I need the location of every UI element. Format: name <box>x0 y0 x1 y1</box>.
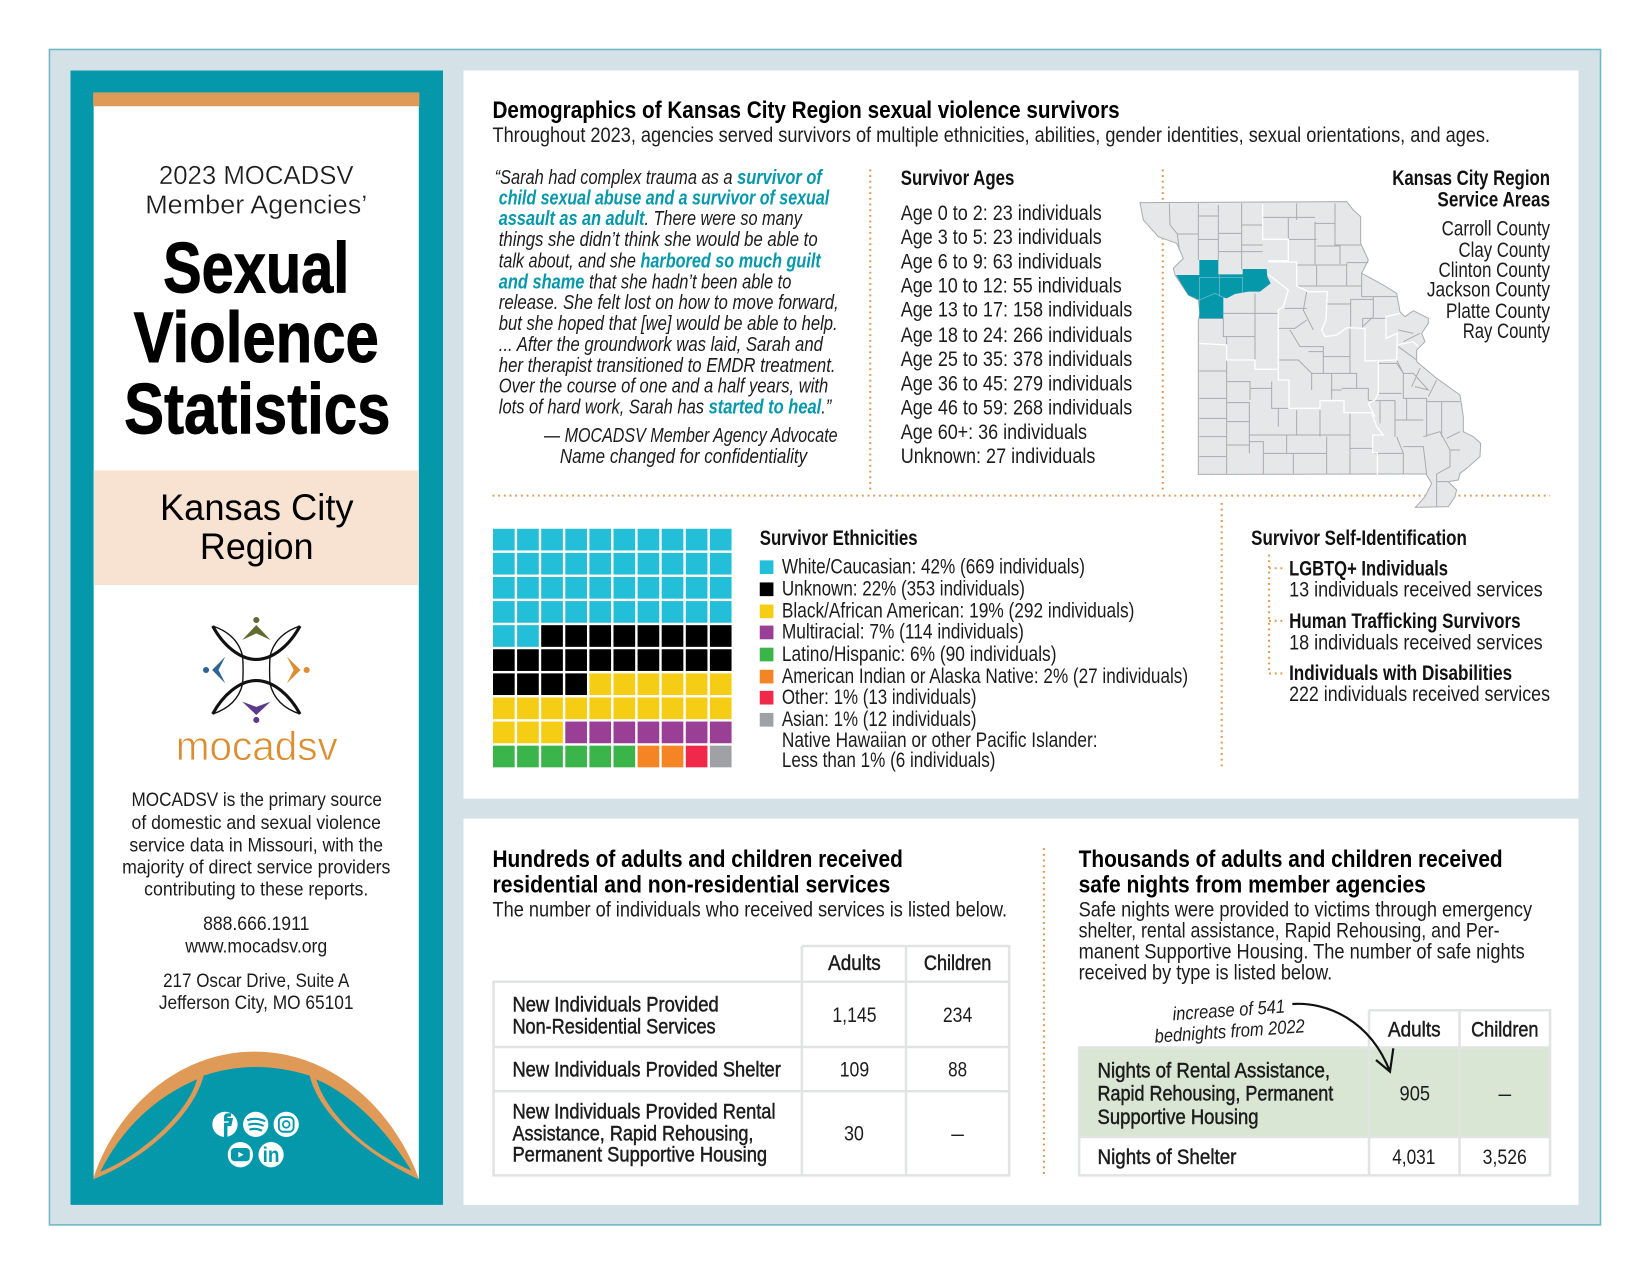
table: services: 88 <box>948 1059 967 1082</box>
survivor self-identification <box>1251 527 1550 706</box>
survivor quote: Over the course of one and a half years, with <box>499 376 828 398</box>
table: safe nights: Children <box>1471 1019 1538 1042</box>
title: Violence <box>134 298 379 378</box>
heading: safe nights: manent Supportive Housing. The number of safe nights <box>1079 941 1525 964</box>
logo: mocadsv: mocadsv <box>176 723 338 769</box>
sidebar description: contributing to these reports. <box>144 880 368 901</box>
service areas list: Platte County <box>1446 300 1550 323</box>
legend: survivor ethnicities <box>760 527 1188 772</box>
dome graphic <box>93 1052 419 1203</box>
table: safe nights: Nights of Shelter <box>1098 1146 1236 1169</box>
heading: demographics: Throughout 2023, agencies served survivors of multiple ethnicities, abilities, gender identities, sexual orientations, and ages. <box>492 124 1490 147</box>
panel: left sidebar <box>71 71 443 1205</box>
region banner: Kansas City <box>160 487 354 528</box>
legend: survivor ethnicities: Survivor Ethnicities <box>760 527 918 550</box>
table: safe nights: 4,031 <box>1392 1146 1435 1169</box>
logo: mocadsv <box>176 617 338 769</box>
survivor self-identification: Human Trafficking Survivors <box>1289 610 1521 633</box>
table: safe nights: Supportive Housing <box>1098 1106 1259 1129</box>
legend: survivor ethnicities: American Indian or Alaska Native: 2% (27 individuals) <box>782 665 1188 688</box>
survivor quote: things she didn’t think she would be able to <box>499 229 818 251</box>
survivor ages list: Unknown: 27 individuals <box>901 445 1095 468</box>
panel: services <box>464 819 1578 1205</box>
service areas list: Carroll County <box>1442 218 1550 241</box>
contact details: 217 Oscar Drive, Suite A <box>163 971 350 992</box>
survivor quote: release. She felt lost on how to move forward, <box>499 292 839 314</box>
table: safe nights: Adults <box>1388 1019 1441 1042</box>
survivor quote: and shame that she hadn’t been able to <box>499 271 791 293</box>
survivor ages list: Age 60+: 36 individuals <box>901 421 1087 444</box>
contact details <box>159 914 354 1014</box>
survivor ages list: Age 3 to 5: 23 individuals <box>901 226 1102 249</box>
heading: demographics <box>492 97 1490 147</box>
table: services: New Individuals Provided Shelter <box>512 1059 781 1082</box>
service areas list: Clay County <box>1458 239 1550 262</box>
sidebar eyebrow: 2023 MOCADSV <box>159 160 354 190</box>
table: services: Permanent Supportive Housing <box>512 1144 767 1167</box>
survivor ages list <box>901 167 1132 468</box>
table: services: Adults <box>828 952 881 975</box>
survivor ages list: Age 6 to 9: 63 individuals <box>901 250 1102 273</box>
service areas list <box>1392 167 1550 343</box>
legend: survivor ethnicities: Unknown: 22% (353 individuals) <box>782 578 1025 601</box>
survivor ages list: Age 13 to 17: 158 individuals <box>901 299 1132 322</box>
table: services: Assistance, Rapid Rehousing, <box>512 1123 753 1146</box>
survivor quote: ... After the groundwork was laid, Sarah and <box>499 334 824 356</box>
icon: facebook <box>212 1112 238 1138</box>
sidebar description: MOCADSV is the primary source <box>132 790 382 811</box>
service areas list: Jackson County <box>1427 279 1550 302</box>
survivor quote: Name changed for confidentiality <box>560 446 808 468</box>
icon: youtube <box>228 1142 253 1167</box>
heading: services: The number of individuals who received services is listed below. <box>492 899 1007 922</box>
sidebar eyebrow: Member Agencies’ <box>145 190 367 220</box>
heading: safe nights <box>1079 846 1533 985</box>
legend: survivor ethnicities: Other: 1% (13 individuals) <box>782 686 977 709</box>
legend: survivor ethnicities: Black/African American: 19% (292 individuals) <box>782 600 1134 623</box>
contact details: Jefferson City, MO 65101 <box>159 993 354 1014</box>
survivor ages list: Age 0 to 2: 23 individuals <box>901 202 1102 225</box>
region banner: Region <box>200 526 314 567</box>
table: safe nights: – <box>1498 1083 1511 1106</box>
callout: bednights increase: increase of 541 <box>1172 997 1286 1025</box>
table: safe nights: 905 <box>1400 1083 1430 1106</box>
callout: bednights increase: bednights from 2022 <box>1154 1016 1306 1048</box>
heading: services: residential and non-residential services <box>492 871 890 898</box>
service areas list: Ray County <box>1463 320 1550 343</box>
survivor quote: talk about, and she harbored so much guilt <box>499 250 822 272</box>
icon: spotify <box>243 1112 268 1137</box>
survivor quote: — MOCADSV Member Agency Advocate <box>543 425 838 447</box>
sidebar description <box>122 790 390 901</box>
table: safe nights: Nights of Rental Assistance, <box>1098 1060 1330 1083</box>
service areas list: Clinton County <box>1438 259 1550 282</box>
legend: survivor ethnicities: White/Caucasian: 42% (669 individuals) <box>782 556 1085 579</box>
icon: instagram <box>274 1112 299 1137</box>
contact details: www.mocadsv.org <box>184 936 327 957</box>
heading: services <box>492 846 1007 922</box>
table: services: New Individuals Provided <box>512 993 719 1016</box>
region banner <box>94 470 419 585</box>
sidebar description: of domestic and sexual violence <box>132 813 381 834</box>
heading: safe nights: shelter, rental assistance, Rapid Rehousing, and Per- <box>1079 920 1500 943</box>
sidebar description: majority of direct service providers <box>122 857 390 878</box>
survivor quote: “Sarah had complex trauma as a survivor of <box>495 167 824 189</box>
survivor self-identification: Individuals with Disabilities <box>1289 662 1512 685</box>
highlighted Kansas City counties <box>1176 260 1271 318</box>
legend: survivor ethnicities: Asian: 1% (12 individuals) <box>782 708 977 731</box>
table: safe nights: Rapid Rehousing, Permanent <box>1098 1083 1333 1106</box>
legend: survivor ethnicities: Less than 1% (6 individuals) <box>782 749 995 772</box>
logo mark <box>203 617 310 723</box>
map: Missouri service areas <box>1140 202 1481 507</box>
survivor ages list: Age 46 to 59: 268 individuals <box>901 397 1132 420</box>
title: Sexual <box>163 229 349 309</box>
survivor self-identification: 18 individuals received services <box>1289 631 1543 654</box>
title: Statistics <box>124 370 390 450</box>
title <box>124 229 390 450</box>
service areas list: Service Areas <box>1437 188 1550 211</box>
table: services: – <box>951 1123 964 1146</box>
icon: linkedin: in <box>263 1144 279 1167</box>
survivor ages list: Age 25 to 35: 378 individuals <box>901 348 1132 371</box>
legend: survivor ethnicities: Latino/Hispanic: 6% (90 individuals) <box>782 643 1057 666</box>
heading: safe nights: Thousands of adults and children received <box>1079 846 1503 873</box>
sidebar description: service data in Missouri, with the <box>129 835 383 856</box>
table: services: Children <box>924 952 991 975</box>
legend: survivor ethnicities: Multiracial: 7% (114 individuals) <box>782 621 1024 644</box>
table: safe nights: 3,526 <box>1483 1146 1527 1169</box>
survivor quote <box>495 167 839 468</box>
legend: survivor ethnicities: Native Hawaiian or other Pacific Islander: <box>782 729 1098 752</box>
table: services <box>494 946 1009 1175</box>
contact details: 888.666.1911 <box>203 914 309 935</box>
arrow <box>1292 1004 1393 1072</box>
survivor self-identification: LGBTQ+ Individuals <box>1289 558 1448 581</box>
heading: demographics: Demographics of Kansas City Region sexual violence survivors <box>492 97 1120 124</box>
service areas list: Kansas City Region <box>1392 167 1550 190</box>
survivor ages list: Age 36 to 45: 279 individuals <box>901 372 1132 395</box>
panel: demographics <box>464 71 1578 799</box>
table: services: 30 <box>844 1123 864 1146</box>
heading: safe nights: Safe nights were provided to victims through emergency <box>1079 899 1533 922</box>
table: services: 1,145 <box>832 1004 877 1027</box>
survivor quote: child sexual abuse and a survivor of sexual <box>499 188 830 210</box>
sidebar eyebrow <box>145 160 367 220</box>
waffle chart: ethnicities <box>493 529 732 767</box>
survivor ages list: Survivor Ages <box>901 167 1014 190</box>
heading: safe nights: safe nights from member agencies <box>1079 871 1426 898</box>
survivor self-identification: 222 individuals received services <box>1289 683 1550 706</box>
survivor quote: but she hoped that [we] would be able to help. <box>499 313 838 335</box>
survivor ages list: Age 18 to 24: 266 individuals <box>901 324 1132 347</box>
heading: safe nights: received by type is listed below. <box>1079 962 1332 985</box>
table: services: 109 <box>840 1059 869 1082</box>
heading: services: Hundreds of adults and children received <box>492 846 903 873</box>
survivor self-identification: Survivor Self-Identification <box>1251 527 1467 550</box>
table: services: Non-Residential Services <box>512 1015 716 1038</box>
survivor quote: her therapist transitioned to EMDR treatment. <box>499 355 836 377</box>
table: services: 234 <box>943 1004 973 1027</box>
survivor ages list: Age 10 to 12: 55 individuals <box>901 275 1122 298</box>
table: services: New Individuals Provided Rental <box>512 1101 776 1124</box>
survivor self-identification: 13 individuals received services <box>1289 579 1543 602</box>
callout: bednights increase <box>1154 997 1393 1072</box>
survivor quote: lots of hard work, Sarah has started to heal.” <box>499 397 832 419</box>
survivor quote: assault as an adult. There were so many <box>499 208 803 230</box>
table: safe nights <box>1079 1010 1550 1175</box>
social icons <box>212 1112 299 1167</box>
